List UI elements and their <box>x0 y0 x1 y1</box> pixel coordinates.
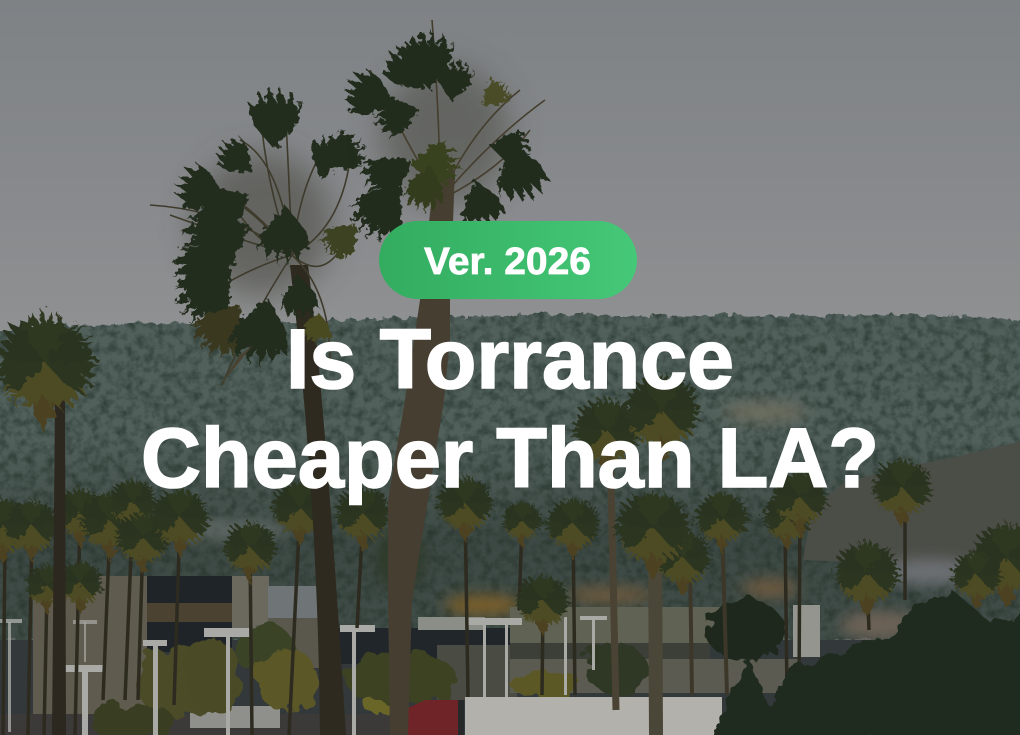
large palm, left <box>150 85 375 735</box>
title <box>141 312 879 505</box>
street lights <box>0 616 607 735</box>
foreground tree cluster <box>712 588 1020 735</box>
title: Cheaper Than LA? <box>141 411 879 505</box>
left palm <box>0 307 105 735</box>
truck <box>408 697 722 735</box>
large palm, centre <box>336 20 554 735</box>
background trees <box>91 600 785 735</box>
small palm crowns <box>0 369 1020 638</box>
version pill <box>379 221 637 299</box>
small palm trunks <box>3 435 1007 735</box>
version pill: Ver. 2026 <box>424 241 591 283</box>
sky background <box>0 0 1020 345</box>
right brown hillside <box>803 441 1020 570</box>
distant hills <box>0 314 1020 640</box>
title: Is Torrance <box>286 312 734 406</box>
buildings <box>0 576 1020 735</box>
hillside town <box>170 520 980 639</box>
